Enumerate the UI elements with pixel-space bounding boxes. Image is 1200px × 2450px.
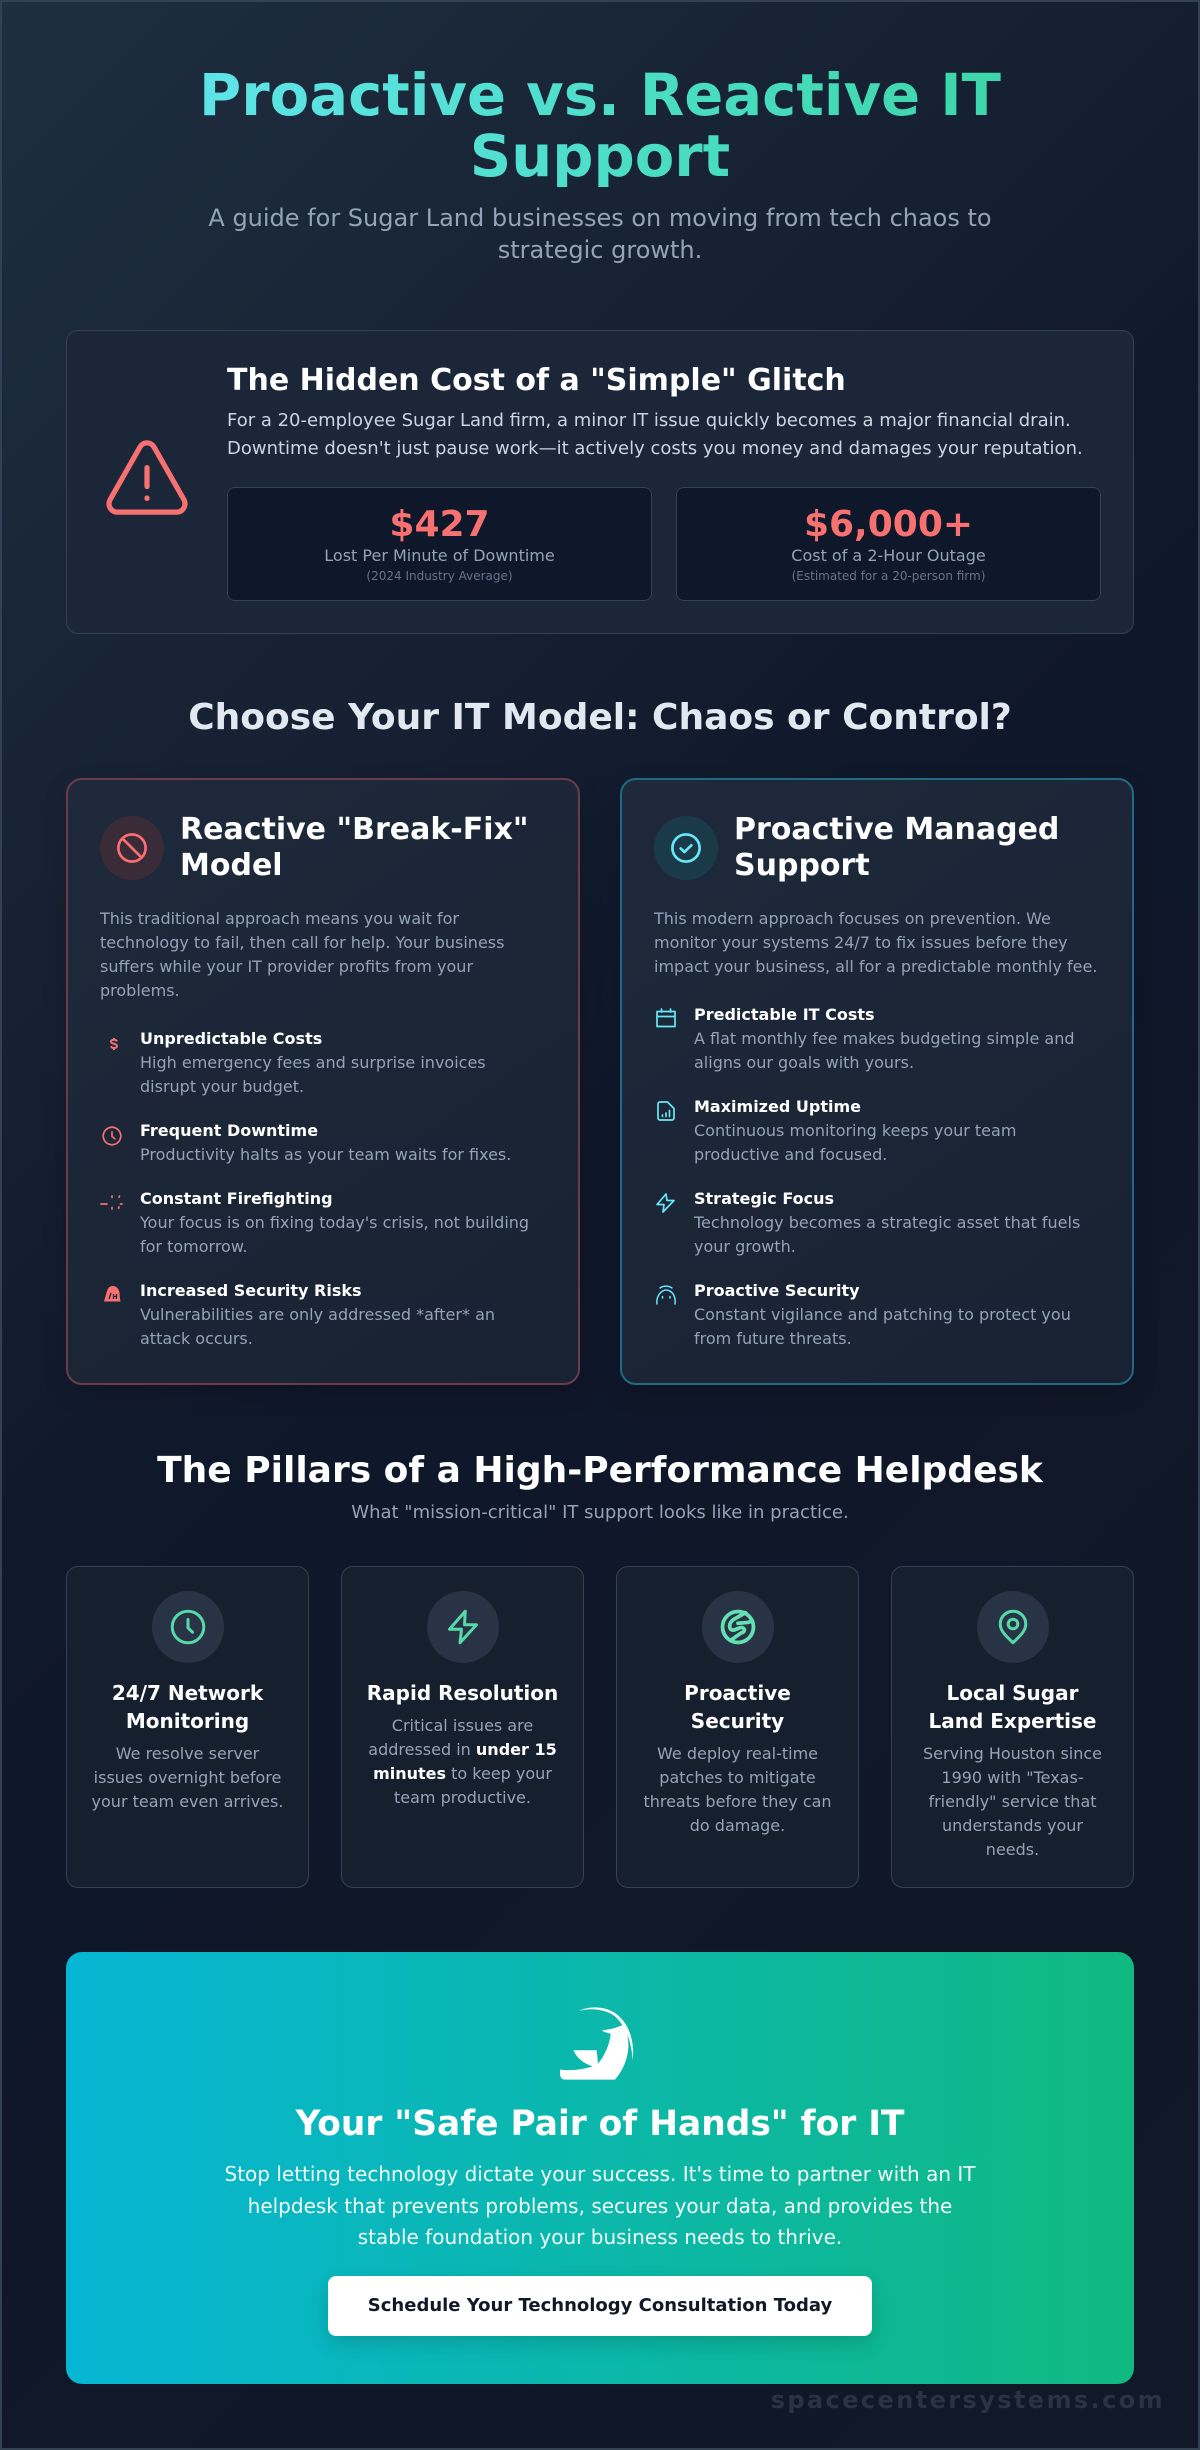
icon: shield swirl <box>702 1591 774 1663</box>
icon: warning triangle <box>106 440 188 515</box>
icon: chart document <box>657 1101 675 1121</box>
heading: reactive: Reactive "Break-Fix" <box>180 812 528 847</box>
icon: bolt <box>427 1591 499 1663</box>
pillar title: Rapid Resolution <box>367 1681 558 1705</box>
text: proactive description <box>654 909 1097 976</box>
pillar title: Monitoring <box>126 1709 249 1733</box>
text: hidden cost description: Downtime doesn't just pause work—it actively costs you money and damages your reputation. <box>227 438 1083 459</box>
item text: disrupt your budget. <box>140 1077 304 1096</box>
text: reactive description <box>100 909 504 1000</box>
item text: Your focus is on fixing today's crisis, not building <box>140 1213 529 1232</box>
item text <box>694 1281 1071 1348</box>
subtitle: strategic growth. <box>498 236 702 264</box>
heading: proactive: Support <box>734 848 870 883</box>
stat note: (2024 Industry Average) <box>366 569 513 583</box>
item text: Constant vigilance and patching to protect you <box>694 1305 1071 1324</box>
item text: Frequent Downtime <box>140 1121 318 1140</box>
item text: from future threats. <box>694 1329 852 1348</box>
item: unpredictable costs <box>110 1029 486 1096</box>
heading: proactive <box>734 812 1059 883</box>
pillar text: We deploy real-time <box>657 1744 818 1763</box>
pillar text: understands your <box>942 1816 1083 1835</box>
pillar text: Critical issues are <box>392 1716 533 1735</box>
icon: security risk <box>104 1286 120 1302</box>
heading: safe pair of hands: Your "Safe Pair of Hands" for IT <box>296 2104 904 2144</box>
subtitle <box>208 204 992 264</box>
item text <box>140 1281 495 1348</box>
heading: proactive: Proactive Managed <box>734 812 1059 847</box>
pillar title: Proactive <box>684 1681 791 1705</box>
pillar text: team productive. <box>394 1788 531 1807</box>
title: Support <box>470 123 730 190</box>
stat label: Cost of a 2-Hour Outage <box>791 546 986 565</box>
pillar title <box>112 1681 264 1733</box>
text: call to action: Stop letting technology dictate your success. It's time to partner with an IT <box>225 2162 975 2186</box>
item text <box>694 1097 1016 1164</box>
item text <box>694 1189 1080 1256</box>
pillar text: issues overnight before <box>94 1768 281 1787</box>
item text: Increased Security Risks <box>140 1281 362 1300</box>
item text: Productivity halts as your team waits for fixes. <box>140 1145 511 1164</box>
icon: map pin <box>977 1591 1049 1663</box>
pillar title <box>929 1681 1096 1733</box>
heading: reactive: Model <box>180 848 283 883</box>
icon: clock <box>152 1591 224 1663</box>
item text: Unpredictable Costs <box>140 1029 322 1048</box>
text: proactive description: impact your business, all for a predictable monthly fee. <box>654 957 1097 976</box>
panel: call to action <box>66 1952 1134 2384</box>
text: call to action <box>225 2162 976 2249</box>
pillar text: do damage. <box>690 1816 785 1835</box>
stat label: Lost Per Minute of Downtime <box>324 546 555 565</box>
panel: hidden cost <box>66 330 1134 634</box>
item text: for tomorrow. <box>140 1237 248 1256</box>
pillar text <box>643 1744 832 1835</box>
pillar title: Security <box>691 1709 784 1733</box>
pillar text: friendly" service that <box>928 1792 1097 1811</box>
item text: Vulnerabilities are only addressed *after* an <box>140 1305 495 1324</box>
pillar text: patches to mitigate <box>659 1768 816 1787</box>
text: proactive description: This modern approach focuses on prevention. We <box>654 909 1051 928</box>
stat value: $6,000+ <box>804 504 973 545</box>
icon: check circle <box>654 816 718 880</box>
item text: High emergency fees and surprise invoices <box>140 1053 486 1072</box>
item text: Constant Firefighting <box>140 1189 333 1208</box>
watermark: spacecentersystems.com <box>771 2386 1165 2414</box>
heading: hidden cost: The Hidden Cost of a "Simple" Glitch <box>227 363 846 398</box>
text: reactive description: suffers while your IT provider profits from your <box>100 957 473 976</box>
icon: dollar <box>110 1038 118 1050</box>
text: proactive description: monitor your systems 24/7 to fix issues before they <box>654 933 1068 952</box>
subheading: pillars: What "mission-critical" IT support looks like in practice. <box>351 1502 849 1523</box>
item text: A flat monthly fee makes budgeting simple and <box>694 1029 1075 1048</box>
pillar text: threats before they can <box>643 1792 832 1811</box>
icon: sparks <box>100 1195 123 1210</box>
icon: calendar <box>656 1008 676 1028</box>
item: predictable costs <box>656 1005 1075 1072</box>
item text <box>140 1029 486 1096</box>
icon: bolt <box>656 1193 675 1213</box>
item text: Proactive Security <box>694 1281 860 1300</box>
item: increased security risks <box>104 1281 495 1348</box>
subtitle: A guide for Sugar Land businesses on moving from tech chaos to <box>208 204 992 232</box>
pillar text: addressed in under 15 <box>368 1740 557 1759</box>
title: Proactive vs. Reactive IT <box>199 62 1001 129</box>
item: constant firefighting <box>100 1189 529 1256</box>
pillar title: 24/7 Network <box>112 1681 263 1705</box>
panel: proactive model <box>620 778 1134 1385</box>
text: call to action: helpdesk that prevents problems, secures your data, and provides the <box>248 2194 952 2218</box>
heading: choose your model: Choose Your IT Model: Chaos or Control? <box>188 697 1012 738</box>
item text: aligns our goals with yours. <box>694 1053 914 1072</box>
pillar: local expertise <box>891 1566 1134 1888</box>
icon: safe hands <box>560 2007 634 2080</box>
item text: Continuous monitoring keeps your team <box>694 1121 1016 1140</box>
item: proactive security <box>656 1281 1071 1348</box>
pillar text: Serving Houston since <box>923 1744 1102 1763</box>
item text: Predictable IT Costs <box>694 1005 875 1024</box>
icon: no symbol <box>100 816 164 880</box>
text: call to action: stable foundation your business needs to thrive. <box>358 2225 842 2249</box>
item text: attack occurs. <box>140 1329 253 1348</box>
stat value: $427 <box>389 504 490 545</box>
icon: signal arcs <box>656 1285 676 1305</box>
item text <box>140 1121 511 1164</box>
item: frequent downtime <box>102 1121 511 1164</box>
item text <box>140 1189 529 1256</box>
item text: Strategic Focus <box>694 1189 834 1208</box>
pillar: network monitoring <box>66 1566 309 1888</box>
panel: reactive model <box>66 778 580 1385</box>
stat note: (Estimated for a 20-person firm) <box>792 569 985 583</box>
pillar text <box>923 1744 1102 1859</box>
pillar: proactive security <box>616 1566 859 1888</box>
heading: reactive <box>180 812 528 883</box>
pillar title: Local Sugar <box>946 1681 1078 1705</box>
text: reactive description: This traditional approach means you wait for <box>100 909 459 928</box>
item: strategic focus <box>656 1189 1080 1256</box>
stat: outage cost <box>676 487 1101 601</box>
item: maximized uptime <box>657 1097 1016 1164</box>
item text: Technology becomes a strategic asset that fuels <box>694 1213 1080 1232</box>
text: reactive description: technology to fail, then call for help. Your business <box>100 933 504 952</box>
item text: productive and focused. <box>694 1145 887 1164</box>
pillar text <box>368 1716 557 1807</box>
item text: Maximized Uptime <box>694 1097 861 1116</box>
text: hidden cost description <box>227 410 1083 459</box>
icon: clock <box>102 1126 122 1146</box>
button: schedule consultation <box>328 2276 872 2336</box>
pillar text: We resolve server <box>116 1744 259 1763</box>
pillar text: your team even arrives. <box>92 1792 283 1811</box>
pillar: rapid resolution <box>341 1566 584 1888</box>
heading: pillars: The Pillars of a High-Performance Helpdesk <box>157 1450 1043 1491</box>
stat: lost per minute <box>227 487 652 601</box>
pillar text: 1990 with "Texas- <box>941 1768 1084 1787</box>
pillar text: minutes to keep your <box>373 1764 552 1783</box>
text: hidden cost description: For a 20-employee Sugar Land firm, a minor IT issue quickly becomes a major financial drain. <box>227 410 1071 431</box>
button: schedule consultation: Schedule Your Technology Consultation Today <box>368 2295 832 2316</box>
title <box>0 65 1200 187</box>
pillar title: Land Expertise <box>929 1709 1096 1733</box>
pillar text: needs. <box>986 1840 1039 1859</box>
item text: your growth. <box>694 1237 796 1256</box>
pillar title <box>684 1681 791 1733</box>
pillar text <box>92 1744 283 1811</box>
text: reactive description: problems. <box>100 981 180 1000</box>
item text <box>694 1005 1075 1072</box>
